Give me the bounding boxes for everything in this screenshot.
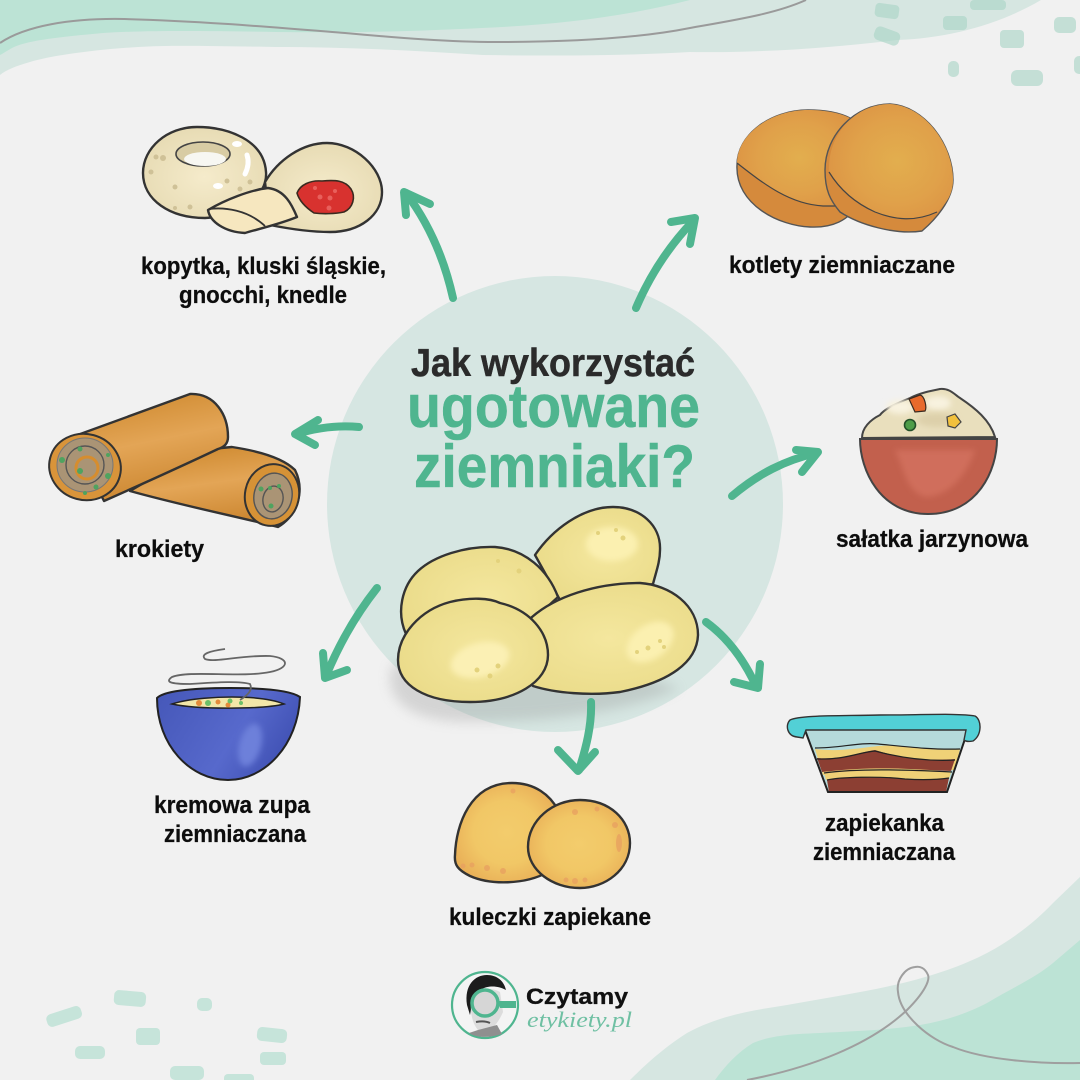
label: zupa: kremowa zupa [154, 792, 311, 819]
title: ziemniaki? [414, 433, 695, 500]
arrow: to zupa [323, 588, 377, 678]
arrow: to zapiekanka [706, 622, 760, 688]
illustration: soup bowl [157, 649, 300, 780]
illustration: salad bowl [860, 389, 997, 514]
arrow: to kotlety [636, 218, 695, 308]
label: kuleczki: kuleczki zapiekane [449, 904, 651, 931]
illustration: kotlety [737, 104, 953, 232]
top wave decoration [0, 0, 1041, 75]
illustration: krokiety [42, 394, 305, 531]
label: kopytka [141, 253, 386, 309]
logo [452, 972, 632, 1038]
label: zapiekanka: zapiekanka [825, 810, 945, 837]
center circle [327, 276, 783, 732]
illustration: kopytka [143, 127, 382, 233]
label: krokiety: krokiety [115, 536, 205, 563]
logo: etykiety.pl [527, 1007, 632, 1032]
logo: Czytamy [526, 984, 629, 1009]
title: ugotowane [407, 373, 700, 440]
label: zupa: ziemniaczana [164, 821, 307, 848]
label: kopytka: gnocchi, knedle [179, 282, 347, 309]
label: kopytka: kopytka, kluski śląskie, [141, 253, 386, 280]
illustration: kuleczki [455, 783, 630, 888]
label: zapiekanka [813, 810, 956, 866]
title [407, 342, 700, 500]
illustration: potatoes [390, 507, 698, 722]
arrow: to kuleczki [558, 702, 595, 771]
arrow: to kopytka [404, 192, 453, 298]
bottom right wave decoration [630, 877, 1080, 1080]
arrow: to salatka [732, 450, 818, 496]
arrow: to krokiety [295, 420, 359, 445]
illustration: zapiekanka [787, 714, 980, 792]
label: kotlety: kotlety ziemniaczane [729, 252, 955, 279]
label: zupa [154, 792, 311, 848]
bottom left dashes [45, 990, 288, 1080]
title: Jak wykorzystać [411, 342, 695, 385]
label: salatka: sałatka jarzynowa [836, 526, 1029, 553]
top right dashes [872, 0, 1080, 86]
label: zapiekanka: ziemniaczana [813, 839, 956, 866]
